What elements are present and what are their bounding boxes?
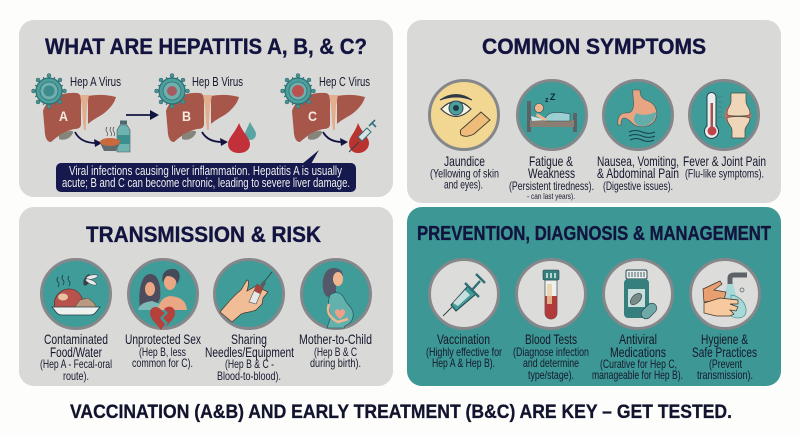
hepatitis C diagram: Hep C Virus [319,74,370,89]
hepatitis C diagram [280,74,376,153]
heading: what are hepatitis: WHAT ARE HEPATITIS A, B, & C? [45,34,367,59]
symptom: nausea, vomiting and abdominal pain [597,80,679,193]
symptom: jaundice [430,80,499,192]
measure: hygiene and safe practices: transmission). [697,368,753,382]
route: sharing needles: Sharing [231,331,267,347]
hepatitis A diagram: A [59,108,68,124]
symptom: fever and joint pain: Fever & Joint Pain [683,153,766,169]
measure: vaccination: Vaccination [437,331,490,347]
symptom: nausea, vomiting and abdominal pain: (Digestive issues). [603,179,673,193]
measure: hygiene and safe practices [690,260,760,382]
route: sharing needles: Blood-to-blood). [217,369,281,383]
callout: definition [56,150,356,192]
route: contaminated food and water: Contaminated [44,331,108,347]
symptom: fatigue and weakness: - can last years). [527,191,575,201]
hepatitis B diagram [154,74,256,153]
route: mother to child [299,260,372,370]
route: sharing needles: (Hep B & C - [225,357,274,371]
callout: definition: acute; B and C can become chronic, leading to severe liver damage. [62,176,350,190]
panel: common symptoms [407,20,781,203]
measure: blood tests: and determine [523,356,579,370]
route: contaminated food and water [40,260,112,383]
measure: blood tests [513,260,589,382]
route: unprotected sex: common for C). [132,356,193,370]
route: sharing needles: Needles/Equipment [205,344,294,360]
measure: hygiene and safe practices: Hygiene & [701,331,748,347]
symptom: fever and joint pain [683,80,766,180]
hepatitis A diagram: Hep A Virus [70,74,121,89]
hepatitis A diagram [32,74,130,152]
route: contaminated food and water: (Hep A - Fecal-oral [40,357,112,371]
route: contaminated food and water: route). [63,369,89,383]
route: mother to child: (Hep B & C [314,345,357,359]
route: sharing needles [205,260,294,383]
measure: antiviral medications: manageable for Hep B). [592,368,683,382]
route: unprotected sex [125,260,201,370]
hepatitis B diagram: Hep B Virus [192,74,243,89]
footer call to action: VACCINATION (A&B) AND EARLY TREATMENT (B&C) ARE KEY – GET TESTED. [70,401,732,423]
measure: antiviral medications: Antiviral [619,331,657,347]
symptom: fatigue and weakness: (Persistent tiredness). [509,179,594,193]
symptom: fatigue and weakness: Weakness [528,165,575,181]
symptom: jaundice: (Yellowing of skin [430,166,499,180]
hepatitis C diagram: C [308,108,317,124]
measure: vaccination: Hep A & Hep B). [432,356,495,370]
panel: transmission and risk [19,207,393,386]
measure: blood tests: (Diagnose infection [513,345,589,359]
symptom: fatigue and weakness: Fatigue & [529,153,573,169]
route: unprotected sex: (Hep B, less [139,345,186,359]
symptom: jaundice: and eyes). [444,178,483,192]
arrow: A to B [126,110,159,120]
route: unprotected sex: Unprotected Sex [125,331,201,347]
measure: hygiene and safe practices: (Prevent [709,357,742,371]
measure: vaccination: (Highly effective for [426,345,502,359]
measure: blood tests: Blood Tests [525,331,577,347]
heading: transmission and risk: TRANSMISSION & RISK [86,222,321,247]
heading: common symptoms: COMMON SYMPTOMS [482,34,706,59]
callout: definition: Viral infections causing liver inflammation. Hepatitis A is usually [69,164,343,178]
route: contaminated food and water: Food/Water [50,344,102,360]
symptom: fatigue and weakness [509,80,594,201]
panel: what are hepatitis A, B and C [19,20,393,197]
symptom: nausea, vomiting and abdominal pain: & Abdominal Pain [597,165,679,181]
route: mother to child: during birth). [310,356,361,370]
symptom: nausea, vomiting and abdominal pain: Nausea, Vomiting, [597,153,679,169]
hepatitis B diagram: B [182,108,191,124]
measure: hygiene and safe practices: Safe Practices [692,344,757,360]
symptom: fatigue and weakness: z [545,97,549,104]
measure: antiviral medications [592,260,683,382]
symptom: fever and joint pain: (Flu-like symptoms). [685,166,764,180]
measure: vaccination [426,260,502,370]
measure: antiviral medications: (Curative for Hep C, [600,357,677,371]
symptom: fatigue and weakness: Z [550,92,556,102]
measure: antiviral medications: Medications [610,344,666,360]
route: mother to child: Mother-to-Child [299,331,372,347]
symptom: jaundice: Jaundice [444,153,485,169]
panel: prevention, diagnosis and management [407,207,781,386]
measure: blood tests: type/stage). [528,368,574,382]
